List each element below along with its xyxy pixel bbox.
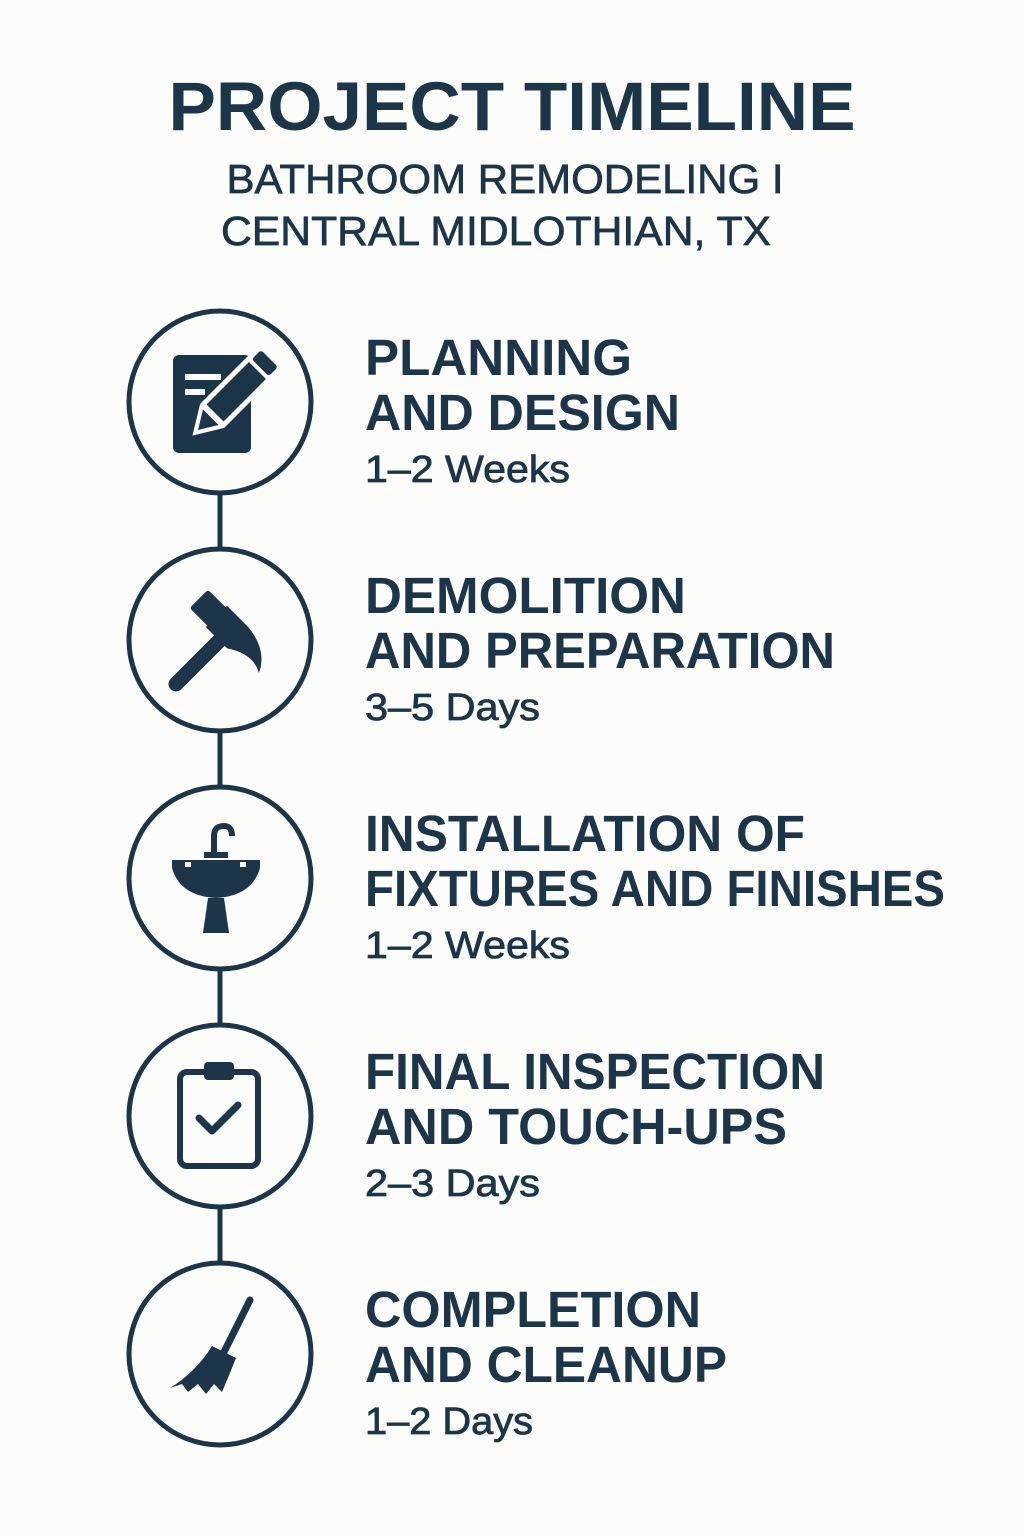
text: installation: INSTALLATION OF [365, 805, 805, 862]
text: installation: FIXTURES AND FINISHES [365, 860, 945, 917]
text: demolition: 3–5 Days [365, 687, 540, 729]
step 4: final inspection [129, 1025, 825, 1207]
icon: hammer [129, 549, 311, 731]
text: demolition: AND PREPARATION [365, 622, 835, 679]
subtitle [221, 156, 784, 254]
icon: document with pencil [129, 311, 311, 493]
text: planning and design: 1–2 Weeks [365, 449, 570, 491]
text: installation [365, 805, 945, 967]
step 3: installation [129, 787, 945, 969]
text: completion: COMPLETION [365, 1281, 701, 1338]
text: completion: AND CLEANUP [365, 1336, 727, 1393]
text: final inspection: 2–3 Days [365, 1163, 540, 1205]
text: planning and design [365, 329, 680, 491]
icon: sink [129, 787, 311, 969]
text: completion [365, 1281, 727, 1443]
text: planning and design: PLANNING [365, 329, 632, 386]
text: completion: 1–2 Days [365, 1401, 533, 1443]
title: PROJECT TIMELINE [168, 68, 856, 145]
step 5: completion [129, 1263, 727, 1445]
text: final inspection [365, 1043, 825, 1205]
icon: clipboard check [129, 1025, 311, 1207]
text: final inspection: AND TOUCH-UPS [365, 1098, 787, 1155]
text: demolition [365, 567, 835, 729]
text: installation: 1–2 Weeks [365, 925, 570, 967]
timeline connectors [218, 494, 222, 1262]
text: demolition: DEMOLITION [365, 567, 686, 624]
icon: broom [129, 1263, 311, 1445]
subtitle: CENTRAL MIDLOTHIAN, TX [221, 208, 771, 254]
text: final inspection: FINAL INSPECTION [365, 1043, 825, 1100]
text: planning and design: AND DESIGN [365, 384, 680, 441]
subtitle: BATHROOM REMODELING I [226, 156, 784, 202]
step 1: planning and design [129, 311, 680, 493]
step 2: demolition [129, 549, 835, 731]
